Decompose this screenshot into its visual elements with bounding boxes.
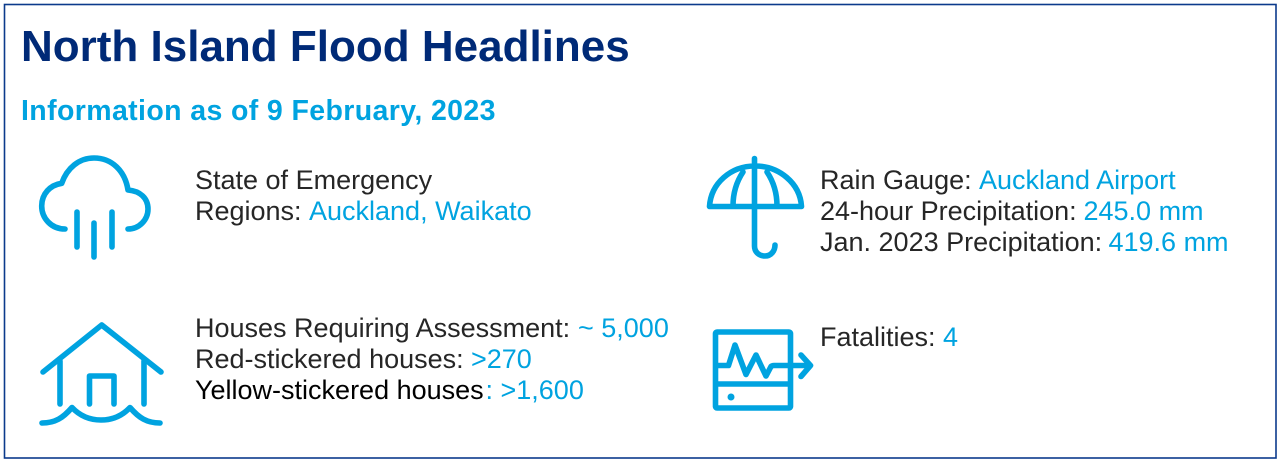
icon: flooded house	[42, 325, 161, 423]
text block: rain gauge: Jan. 2023 Precipitation:	[820, 227, 1102, 257]
text block: rain gauge	[820, 165, 1229, 257]
text block: rain gauge: 245.0 mm	[1084, 196, 1204, 226]
text block: rain gauge: Rain Gauge:	[820, 165, 972, 195]
text block: houses: Yellow-stickered houses	[195, 375, 484, 405]
text block: rain gauge: 419.6 mm	[1108, 227, 1229, 257]
text block: state of emergency: Regions:	[195, 196, 302, 226]
text block: houses: ~ 5,000	[578, 313, 669, 343]
text block: houses	[195, 313, 669, 405]
icon: vital signs monitor	[716, 332, 810, 408]
text block: houses: >270	[471, 344, 532, 374]
text block: state of emergency: State of Emergency	[195, 165, 433, 195]
icon: umbrella	[710, 158, 802, 256]
text block: fatalities: Fatalities:	[820, 322, 936, 352]
text block: houses: Houses Requiring Assessment:	[195, 313, 570, 343]
text block: houses: Red-stickered houses:	[195, 344, 464, 374]
text block: state of emergency: Auckland, Waikato	[309, 196, 532, 226]
title: North Island Flood Headlines	[21, 22, 630, 71]
icon: rain cloud	[42, 158, 148, 257]
text block: rain gauge: 24-hour Precipitation:	[820, 196, 1077, 226]
subtitle: date: Information as of 9 February, 2023	[21, 95, 496, 127]
text block: fatalities: 4	[943, 322, 958, 352]
text block: houses: : >1,600	[486, 375, 584, 405]
text block: state of emergency	[195, 165, 532, 226]
text block: rain gauge: Auckland Airport	[979, 165, 1176, 195]
